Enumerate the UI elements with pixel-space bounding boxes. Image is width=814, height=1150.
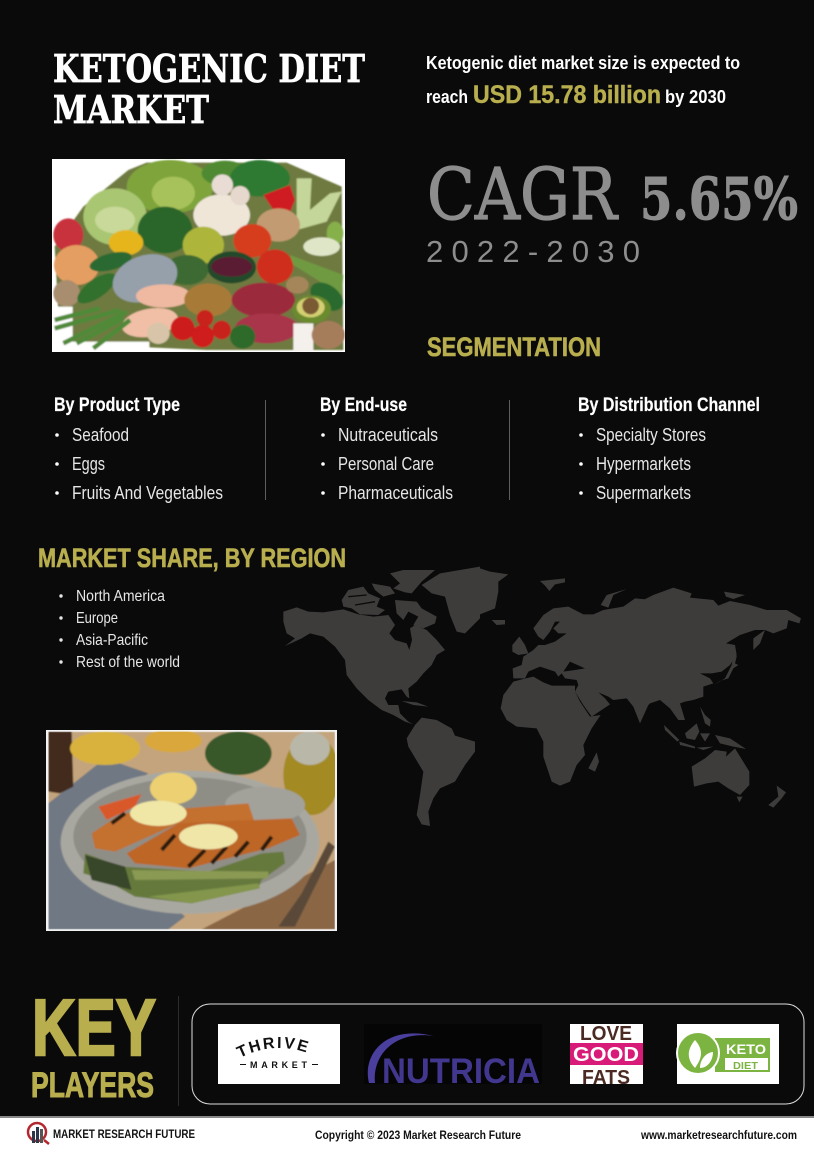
segment: by product type: Eggs: [72, 454, 105, 474]
logo: Thrive Market: [218, 1024, 340, 1084]
title: KETOGENIC DIET: [53, 46, 365, 91]
heading: key players: PLAYERS: [31, 1066, 154, 1105]
segment: by end-use: Pharmaceuticals: [338, 483, 453, 503]
segment: by end-use: Personal Care: [338, 454, 434, 474]
logo: Thrive Market: THRIVE: [236, 1037, 308, 1056]
market size statement: Ketogenic diet market size is expected to: [426, 53, 740, 73]
footer bar: MARKET RESEARCH FUTURE: [53, 1127, 195, 1141]
market size statement: USD 15.78 billion: [473, 81, 661, 109]
CAGR figure: 2022-2030: [426, 234, 640, 269]
market size statement: [426, 53, 740, 109]
logo: Keto Diet: KETO: [726, 1041, 766, 1057]
photo: grilled salmon plate: [46, 729, 340, 931]
region list: Europe: [76, 610, 118, 627]
logo: Nutricia: NUTRICIA: [382, 1052, 540, 1091]
logo: Love Good Fats: LOVE: [580, 1023, 632, 1045]
logo: Love Good Fats: GOOD: [573, 1044, 639, 1066]
logo: Keto Diet: DIET: [733, 1061, 758, 1072]
segment: by product type: By Product Type: [54, 395, 180, 416]
heading: key players: [31, 983, 156, 1105]
segment: by product type: [54, 395, 223, 503]
heading: segmentation: SEGMENTATION: [427, 332, 601, 362]
segment: by end-use: By End-use: [320, 395, 407, 416]
footer bar: Copyright © 2023 Market Research Future: [315, 1128, 521, 1142]
logo: Love Good Fats: [570, 1023, 643, 1089]
heading: key players: KEY: [32, 983, 156, 1072]
region list: North America: [76, 588, 165, 605]
title: [53, 46, 365, 132]
CAGR figure: [426, 153, 798, 269]
title: MARKET: [53, 87, 209, 132]
logo: Love Good Fats: FATS: [582, 1067, 630, 1089]
segment: by distribution channel: [578, 395, 760, 503]
segment: by end-use: Nutraceuticals: [338, 425, 438, 445]
segment: by distribution channel: By Distribution Channel: [578, 395, 760, 416]
segment: by distribution channel: Hypermarkets: [596, 454, 691, 474]
CAGR figure: CAGR: [427, 153, 619, 236]
market size statement: reach: [426, 87, 468, 107]
logo: Keto Diet: [677, 1024, 779, 1084]
heading: market share by region: MARKET SHARE, BY REGION: [38, 543, 346, 573]
segment: by product type: Seafood: [72, 425, 129, 445]
segment: by end-use: [320, 395, 453, 503]
segment: by product type: Fruits And Vegetables: [72, 483, 223, 503]
logo: Nutricia: [364, 1024, 542, 1091]
panel: company logos: [192, 1004, 804, 1104]
photo: vegetables, fish and meat: [52, 159, 348, 353]
world map: [283, 567, 801, 826]
icon: market research future logo: [28, 1123, 49, 1144]
region list: [59, 588, 180, 671]
segment: by distribution channel: Specialty Stores: [596, 425, 706, 445]
logo: Thrive Market: MARKET: [250, 1060, 308, 1070]
footer bar: [0, 1116, 814, 1150]
region list: Rest of the world: [76, 654, 180, 671]
region list: Asia-Pacific: [76, 632, 148, 649]
market size statement: by 2030: [665, 87, 726, 107]
segment: by distribution channel: Supermarkets: [596, 483, 691, 503]
